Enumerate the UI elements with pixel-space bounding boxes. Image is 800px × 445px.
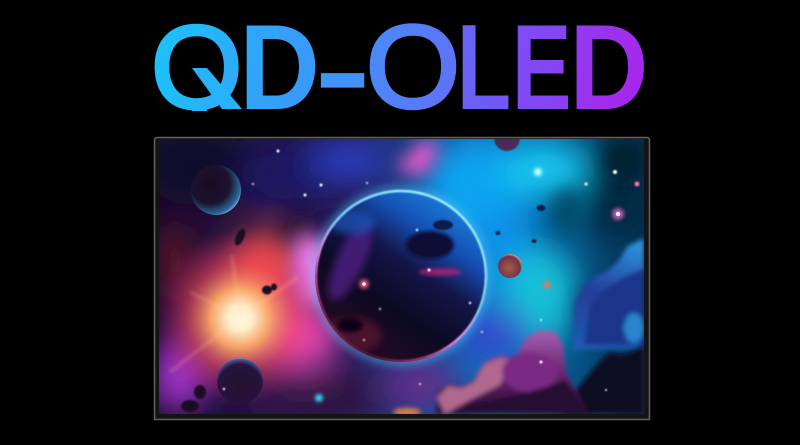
title: Q (151, 2, 242, 134)
title: O (366, 2, 460, 133)
asteroids (496, 205, 546, 243)
dark lower right corner (560, 345, 644, 414)
infographic canvas (154, 23, 650, 420)
TV frame (154, 138, 650, 420)
dark cloud specks (181, 227, 277, 412)
TV (140, 125, 650, 420)
blue clouds right (572, 238, 644, 350)
title: D (239, 0, 320, 135)
title: E (512, 0, 572, 135)
title (154, 23, 644, 111)
explosion (159, 234, 316, 402)
stars (223, 150, 617, 391)
Q tail accent (192, 68, 242, 109)
TV screen nebula artwork (140, 125, 645, 417)
title: - (314, 3, 371, 138)
title: D (569, 0, 649, 135)
glowing stars (315, 168, 640, 402)
planet: top partial (493, 139, 521, 152)
title: L (457, 0, 511, 135)
planet: lower (217, 358, 263, 404)
planet: upper left (191, 165, 241, 215)
planet: right small (498, 254, 522, 278)
pink and purple clouds bottom right (393, 330, 590, 416)
planet: large (310, 185, 492, 367)
